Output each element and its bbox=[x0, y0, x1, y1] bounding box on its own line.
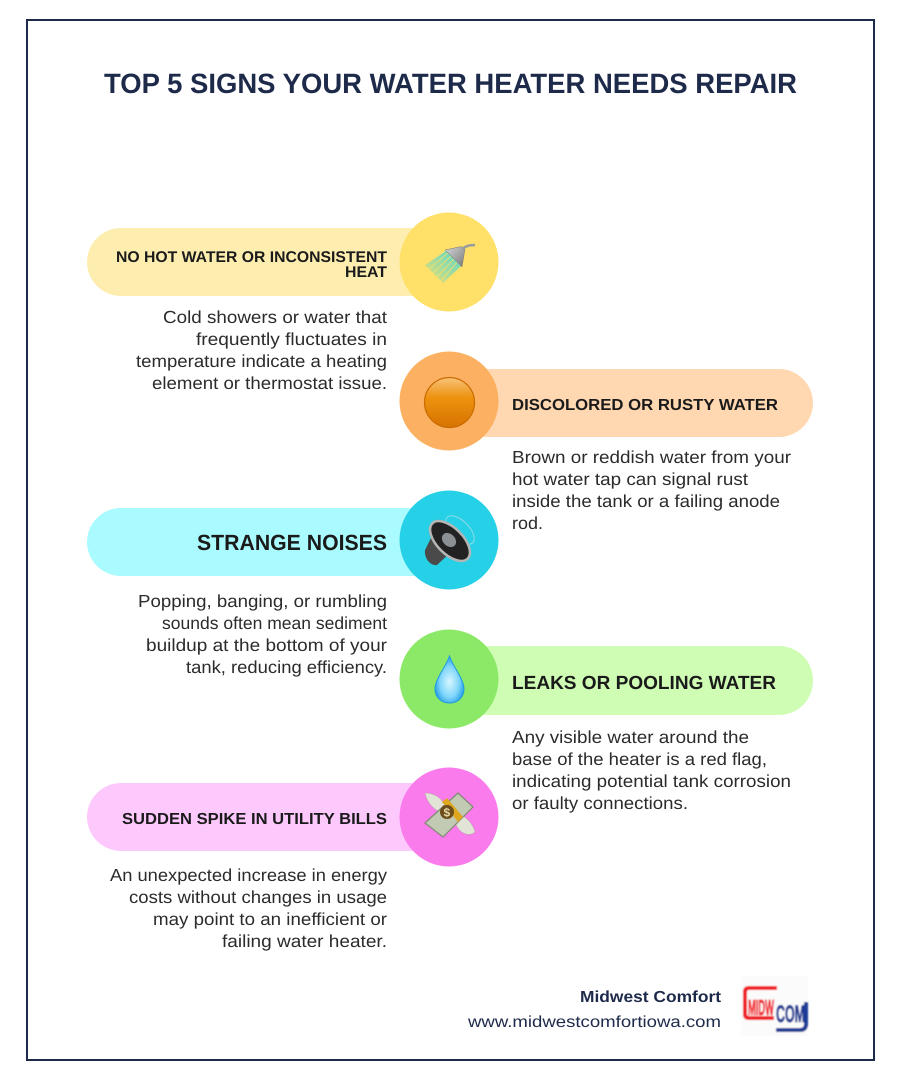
description bbox=[110, 865, 387, 951]
description: Brown or reddish water from your bbox=[512, 447, 791, 467]
description: frequently fluctuates in bbox=[196, 329, 387, 349]
heading text bbox=[116, 249, 388, 281]
description bbox=[136, 307, 387, 393]
panel: utility bills bbox=[87, 768, 498, 951]
panel: discolored water bbox=[400, 352, 813, 533]
description: may point to an inefficient or bbox=[153, 909, 387, 929]
description bbox=[138, 591, 387, 677]
description: failing water heater. bbox=[222, 931, 387, 951]
description: An unexpected increase in energy bbox=[110, 865, 387, 885]
icon: water drop bbox=[435, 656, 464, 703]
description: sounds often mean sediment bbox=[162, 613, 387, 633]
description: hot water tap can signal rust bbox=[512, 469, 748, 489]
heading bar bbox=[87, 228, 447, 296]
description: rod. bbox=[512, 513, 543, 533]
description: buildup at the bottom of your bbox=[146, 635, 387, 655]
circle bbox=[400, 490, 498, 590]
description: base of the heater is a red flag, bbox=[512, 749, 767, 769]
description: costs without changes in usage bbox=[129, 887, 387, 907]
description: element or thermostat issue. bbox=[152, 373, 387, 393]
description: indicating potential tank corrosion bbox=[512, 771, 791, 791]
heading bar bbox=[87, 783, 447, 851]
heading text: SUDDEN SPIKE IN UTILITY BILLS bbox=[122, 811, 387, 828]
description: Any visible water around the bbox=[512, 727, 749, 747]
circle bbox=[400, 352, 498, 450]
panel: no hot water bbox=[87, 212, 498, 393]
heading text: DISCOLORED OR RUSTY WATER bbox=[512, 397, 778, 414]
icon: orange circle bbox=[424, 378, 474, 428]
title: TOP 5 SIGNS YOUR WATER HEATER NEEDS REPAIR bbox=[104, 68, 797, 99]
heading bar bbox=[453, 369, 813, 437]
description: temperature indicate a heating bbox=[136, 351, 387, 371]
panel: strange noises bbox=[87, 490, 498, 677]
circle bbox=[400, 630, 498, 728]
icon: money with wings: $ bbox=[444, 806, 450, 820]
footer: website: www.midwestcomfortiowa.com bbox=[467, 1014, 721, 1031]
logo: COM bbox=[776, 1001, 805, 1028]
heading text: HEAT bbox=[345, 264, 388, 281]
circle bbox=[400, 212, 498, 312]
description: Popping, banging, or rumbling bbox=[138, 591, 387, 611]
heading text: STRANGE NOISES bbox=[197, 530, 387, 555]
icon: speaker bbox=[423, 511, 479, 568]
description bbox=[512, 447, 791, 533]
logo bbox=[741, 976, 808, 1036]
description: inside the tank or a failing anode bbox=[512, 491, 780, 511]
description: or faulty connections. bbox=[512, 793, 688, 813]
description bbox=[512, 727, 791, 813]
heading text: NO HOT WATER OR INCONSISTENT bbox=[116, 249, 388, 266]
description: tank, reducing efficiency. bbox=[186, 657, 387, 677]
icon: money with wings bbox=[425, 793, 475, 837]
description: Cold showers or water that bbox=[163, 307, 387, 327]
footer: company name: Midwest Comfort bbox=[580, 989, 722, 1006]
circle bbox=[400, 768, 498, 866]
logo: MIDW bbox=[748, 995, 774, 1020]
heading text: LEAKS OR POOLING WATER bbox=[512, 673, 776, 694]
icon: shower head bbox=[425, 245, 475, 283]
heading bar bbox=[87, 508, 447, 576]
heading bar bbox=[453, 646, 813, 715]
panel: leaks bbox=[400, 630, 813, 813]
